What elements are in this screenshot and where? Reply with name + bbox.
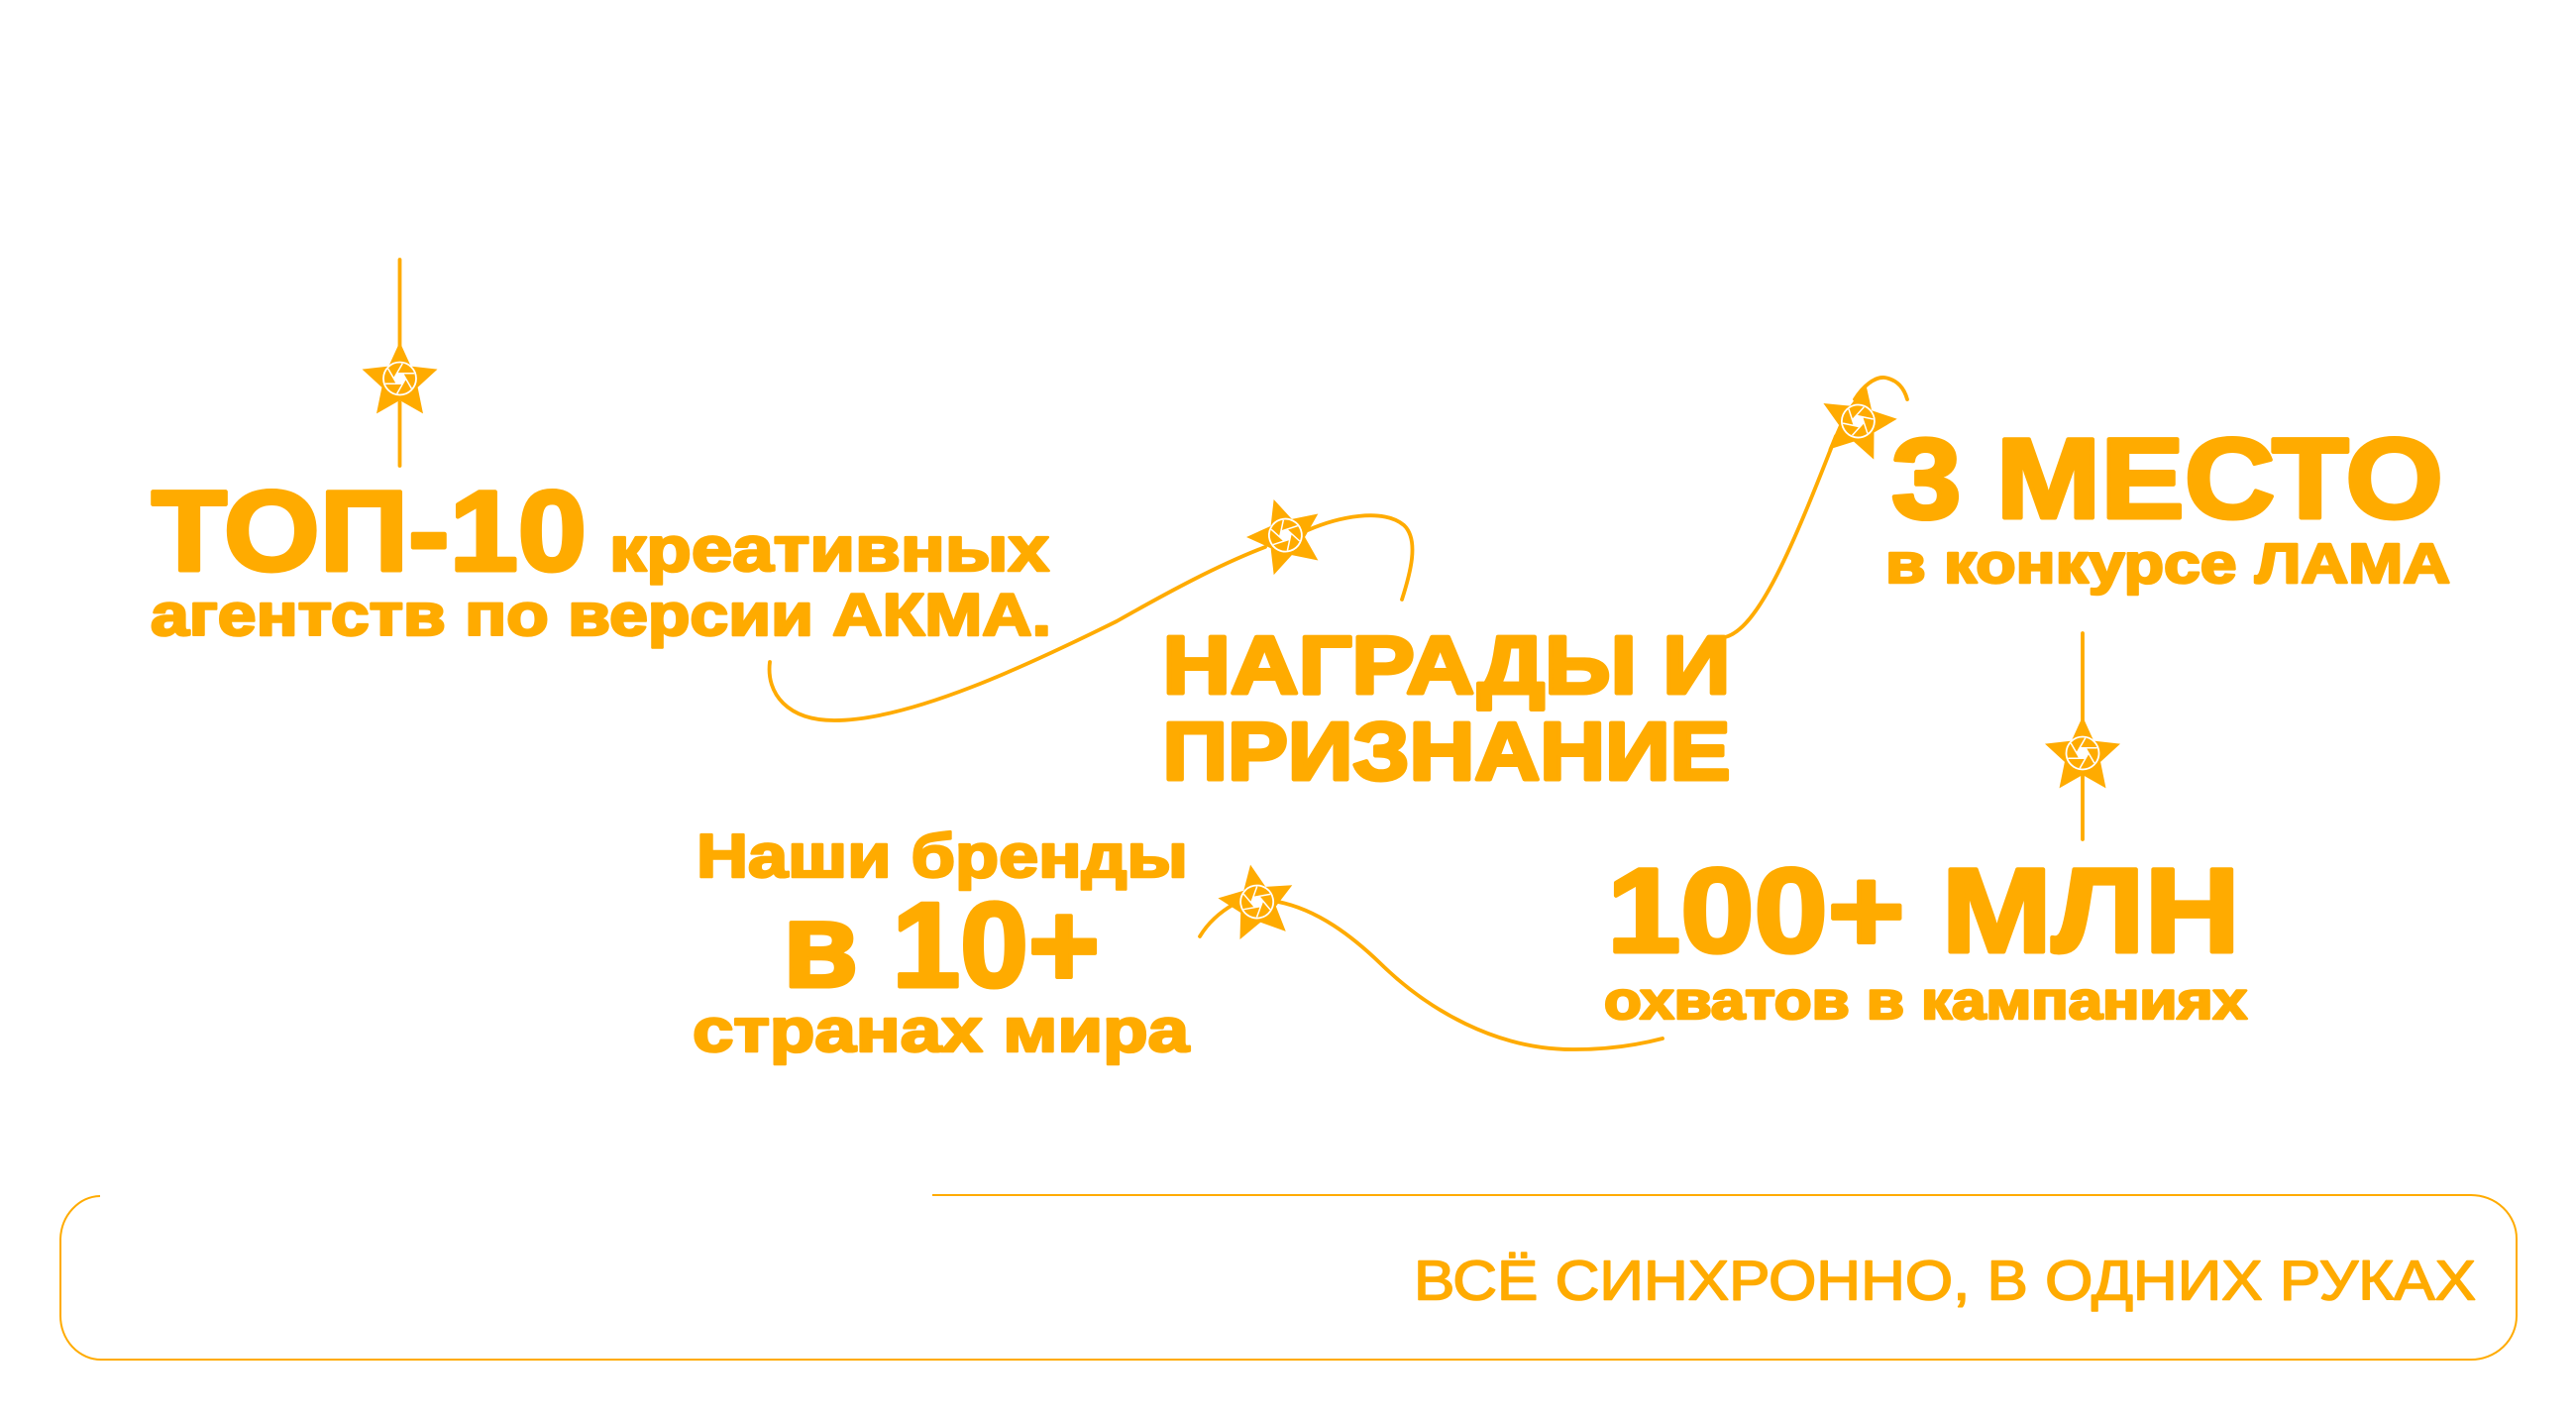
heading: ТОП-10: ТОП-10 [152, 468, 587, 595]
heading: в 10+: в 10+ [783, 878, 1100, 1013]
curved arrow: top-10 to awards with star [770, 488, 1413, 720]
achievement: 100+ million reach [1604, 633, 2247, 1031]
curve [1200, 902, 1663, 1049]
vertical line through star [2081, 633, 2085, 839]
text: в конкурсе ЛАМА: в конкурсе ЛАМА [1885, 532, 2450, 596]
icon: star with aperture [1814, 377, 1902, 463]
text: охватов в кампаниях: охватов в кампаниях [1604, 971, 2247, 1031]
heading: 3 МЕСТО: 3 МЕСТО [1891, 416, 2443, 543]
icon: star with aperture [363, 342, 438, 413]
curve [770, 515, 1413, 720]
curve [1725, 378, 1907, 637]
title line 1: НАГРАДЫ И [1163, 618, 1730, 712]
curved arrow: reach to countries with star [1200, 858, 1663, 1049]
achievement: brands in 10+ countries [693, 822, 1190, 1065]
title line 2: ПРИЗНАНИЕ [1163, 706, 1730, 797]
icon: star with aperture [2045, 716, 2120, 788]
text: агентств по версии АКМА.: агентств по версии АКМА. [151, 582, 1051, 648]
center title: awards and recognition [1163, 618, 1730, 797]
text: tagline: ВСЁ СИНХРОННО, В ОДНИХ РУКАХ [1414, 1249, 2476, 1312]
icon: star with aperture [1214, 858, 1300, 942]
vertical line through star [398, 260, 401, 466]
curved arrow: awards to third place with star [1725, 377, 1907, 637]
text: странах мира: странах мира [693, 997, 1190, 1065]
heading: 100+ МЛН: 100+ МЛН [1607, 842, 2240, 977]
achievement: third place [1885, 416, 2450, 596]
achievement: top-10 agencies [151, 260, 1051, 648]
panel outline [60, 1195, 2517, 1360]
text: креативных: креативных [609, 513, 1049, 585]
bottom panel [60, 1195, 2517, 1360]
text: Наши бренды: Наши бренды [697, 822, 1188, 891]
icon: star with aperture [1237, 488, 1332, 580]
